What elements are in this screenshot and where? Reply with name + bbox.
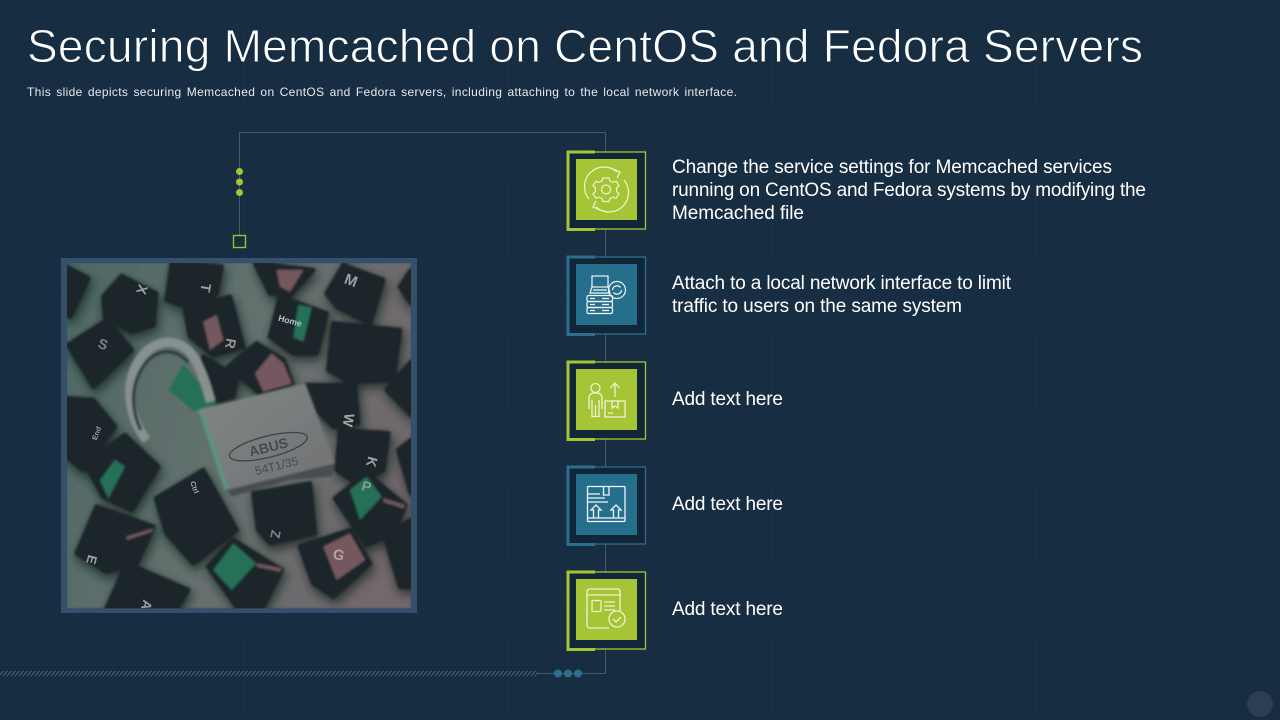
step 5 — [568, 572, 783, 650]
key labels: End — [90, 425, 103, 441]
key labels: W — [340, 412, 358, 429]
step 2 text — [672, 273, 1012, 317]
subtitle: This slide depicts securing Memcached on CentOS and Fedora servers, including attaching to the local network interface. — [27, 85, 737, 99]
hatched footer line — [0, 671, 538, 676]
key labels: T — [197, 282, 215, 294]
key labels: S — [96, 335, 110, 353]
key labels: X — [133, 282, 151, 297]
step 3 text: Add text here — [672, 389, 783, 410]
photo: open padlock on scattered keyboard keys — [61, 258, 417, 613]
step 4 — [568, 467, 783, 544]
connector top dots — [236, 168, 243, 196]
connector lines — [240, 132, 606, 674]
key labels: G — [331, 547, 346, 565]
lock engraving — [228, 432, 308, 475]
step 1 frame — [568, 152, 646, 230]
step 1 — [568, 152, 1146, 230]
key labels: R — [222, 337, 240, 350]
icon: person with parcel and up arrow — [589, 383, 625, 417]
step 3 — [568, 362, 783, 440]
step 5 frame — [568, 572, 646, 650]
icon: laptop and servers with sync — [587, 276, 626, 314]
key labels: Home — [277, 313, 303, 329]
connector end square — [234, 236, 246, 248]
lock engraving: 54T1/35 — [253, 454, 300, 478]
step 3 frame — [568, 362, 646, 440]
key labels: K — [363, 455, 381, 469]
step 4 frame — [568, 467, 646, 544]
title: Securing Memcached on CentOS and Fedora Servers — [27, 20, 1143, 72]
step 1 text: Change the service settings for Memcached services — [672, 157, 1112, 178]
step 1 text: running on CentOS and Fedora systems by modifying the — [672, 180, 1146, 201]
step 2 text: traffic to users on the same system — [672, 296, 962, 317]
key labels: Z — [267, 529, 284, 540]
icon: id card with check badge — [587, 589, 625, 628]
key labels: M — [342, 271, 360, 291]
icon: gear with rotating arrows — [584, 167, 629, 212]
key labels: A — [138, 598, 155, 612]
step 5 text: Add text here — [672, 599, 783, 620]
key labels: E — [83, 553, 100, 566]
step 2 text: Attach to a local network interface to limit — [672, 273, 1012, 294]
key labels: P — [360, 477, 373, 495]
key labels — [83, 271, 381, 612]
step 2 frame — [568, 257, 646, 334]
corner circle — [1247, 691, 1273, 717]
icon: parcel with up arrows — [588, 486, 625, 522]
step 1 text: Memcached file — [672, 203, 804, 224]
step 4 text: Add text here — [672, 494, 783, 515]
step 2 — [568, 257, 1012, 334]
lock engraving: ABUS — [247, 434, 290, 460]
footer dots — [554, 670, 582, 678]
key labels: Ctrl — [188, 480, 201, 495]
step 1 text — [672, 157, 1146, 224]
